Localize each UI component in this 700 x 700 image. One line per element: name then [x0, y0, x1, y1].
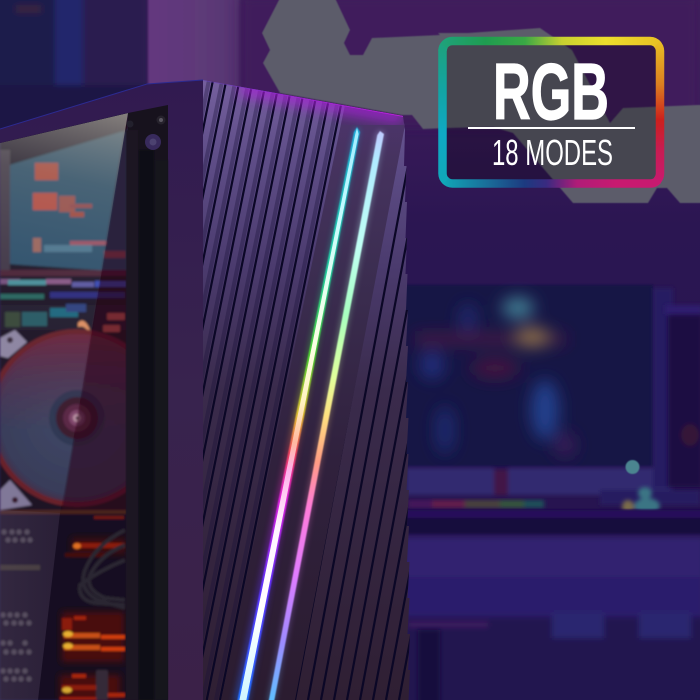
motherboard panel	[10, 130, 128, 272]
wall glow behind hex panels	[240, 0, 700, 125]
stool leg	[418, 630, 440, 700]
black inner frame rail	[126, 105, 168, 700]
lower board with red traces	[0, 510, 128, 700]
ribbed fin grooves right	[295, 116, 410, 700]
monitor dot light	[626, 460, 640, 474]
grey port dots	[0, 530, 32, 682]
cables	[80, 530, 125, 608]
led strip right	[267, 130, 385, 700]
interior of case behind glass	[0, 113, 128, 700]
magenta top glow	[240, 87, 403, 116]
monitor image blur	[415, 297, 575, 457]
case top band and side column	[0, 80, 204, 700]
glass tint over lower board	[0, 510, 60, 700]
dark shade right of glass over fan	[60, 113, 127, 520]
badge rainbow border	[442, 41, 660, 184]
glowing red lights	[60, 543, 125, 700]
flat led band	[221, 100, 406, 700]
fan brackets	[0, 330, 32, 510]
front panel	[203, 80, 410, 700]
rgb badge	[442, 41, 660, 184]
keyboard-like rgb row	[0, 270, 128, 330]
red light bloom	[60, 538, 126, 700]
hexagon light panels	[262, 0, 700, 203]
fin shadows	[203, 80, 338, 696]
small red lights	[76, 312, 126, 334]
subheading: 18 MODES: 18 MODES	[492, 132, 613, 173]
pc case	[0, 80, 410, 700]
left dark wall	[0, 0, 150, 140]
pale wall column	[148, 0, 240, 95]
frame screws	[126, 116, 166, 150]
desk edge	[404, 510, 700, 534]
heading: RGB: RGB	[493, 47, 609, 136]
badge translucent fill	[442, 41, 660, 184]
RGB strip on desk	[408, 500, 544, 508]
led strip left	[233, 127, 360, 700]
monitor bezel and shelf	[406, 288, 700, 505]
red connectors	[33, 163, 126, 258]
tinted glass reflection	[0, 113, 128, 513]
lower cabinet	[404, 537, 700, 700]
ribbed fin grooves left	[203, 82, 342, 700]
teal desk lamp	[622, 487, 660, 514]
monitor screen	[404, 285, 653, 466]
case fan	[0, 328, 126, 508]
divider line	[468, 127, 635, 129]
right dark panel	[665, 305, 700, 487]
